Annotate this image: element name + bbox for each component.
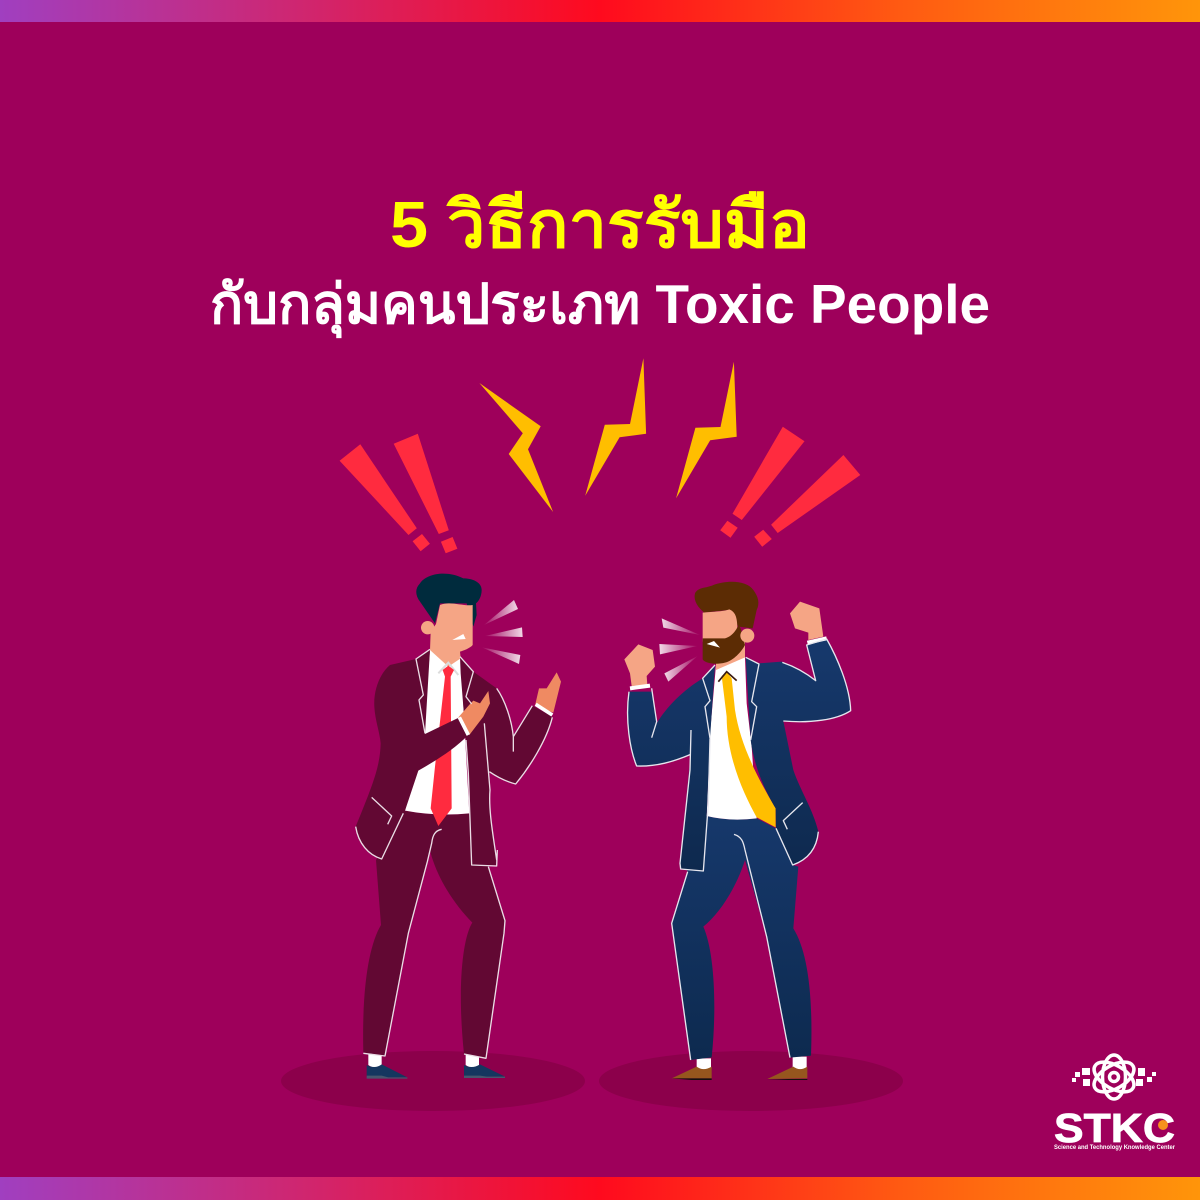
man right in navy suit <box>624 582 851 1080</box>
man left in maroon suit <box>356 574 561 1079</box>
beard <box>703 625 745 664</box>
logo atom icon <box>1089 1055 1139 1099</box>
speech lines <box>659 618 700 682</box>
shoes <box>367 1064 505 1077</box>
shirt <box>707 657 757 820</box>
right fist <box>790 602 823 640</box>
bolt 2 <box>585 358 646 496</box>
bolt 3 <box>676 362 737 498</box>
jacket right panel and arm <box>746 638 851 865</box>
jacket left panel and sleeve <box>356 649 468 859</box>
ear <box>421 621 434 634</box>
collar <box>718 672 737 682</box>
neck and head <box>695 582 758 670</box>
trousers <box>672 816 811 1060</box>
title line 1: 5 วิธีการรับมือ <box>390 188 810 261</box>
socks <box>368 1053 479 1067</box>
mouth <box>707 641 720 648</box>
logo wordmark: STKC <box>1054 1105 1175 1151</box>
top gradient bar <box>0 0 1200 22</box>
face <box>430 603 473 667</box>
shoe soles <box>672 1078 807 1080</box>
shirt <box>405 649 469 815</box>
title line 2: กับกลุ่มคนประเภท Toxic People <box>210 273 990 339</box>
hand on chest <box>458 691 490 735</box>
ground shadow left <box>281 1051 585 1111</box>
neck <box>716 642 745 670</box>
title <box>210 188 990 339</box>
neck and face <box>416 574 482 667</box>
bottom gradient bar <box>0 1177 1200 1200</box>
shoe soles <box>367 1076 505 1079</box>
trousers <box>363 811 505 1058</box>
logo orange dot <box>1158 1120 1168 1130</box>
ground shadow right <box>599 1051 903 1111</box>
logo tagline: Science and Technology Knowledge Center <box>1054 1145 1176 1151</box>
shoes <box>672 1067 807 1079</box>
jacket right panel and arm <box>460 657 552 865</box>
bolt 1 <box>479 383 553 512</box>
raised hand <box>535 672 561 713</box>
socks <box>697 1057 807 1071</box>
hair <box>416 574 482 627</box>
tie <box>722 672 776 827</box>
exclamation marks right <box>720 427 860 547</box>
logo pixel squares <box>1072 1068 1156 1086</box>
face <box>703 609 738 642</box>
tie <box>431 666 454 826</box>
suit outlines <box>628 639 851 1060</box>
left fist <box>624 644 655 686</box>
speech lines <box>482 600 523 664</box>
mouth <box>452 634 466 640</box>
hair <box>695 582 758 628</box>
logo STKC <box>1054 1055 1176 1151</box>
jacket left panel and arm <box>628 665 715 871</box>
collar <box>438 663 458 675</box>
exclamation marks left <box>340 434 457 553</box>
cuffs <box>630 638 827 688</box>
ear <box>740 629 754 643</box>
suit outlines <box>356 649 552 1058</box>
cuffs <box>459 704 552 735</box>
lightning bolts <box>479 358 737 512</box>
